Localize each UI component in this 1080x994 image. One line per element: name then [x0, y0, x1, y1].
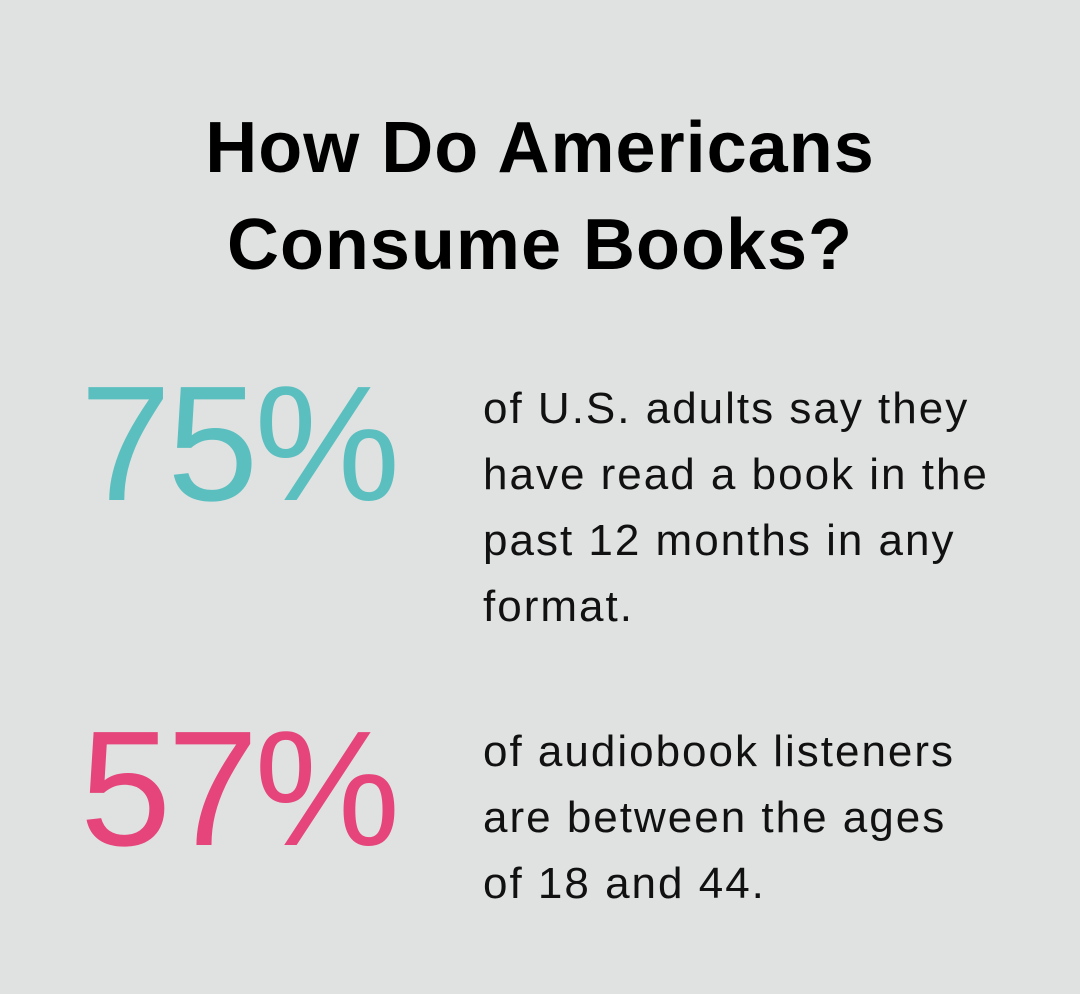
title: How Do Americans	[205, 108, 875, 188]
text: 75% description: format.	[483, 582, 634, 631]
text: 57% description: are between the ages	[483, 793, 946, 842]
text: 75% description: have read a book in the	[483, 450, 989, 499]
title	[205, 108, 875, 285]
text: 75% description: past 12 months in any	[483, 516, 955, 565]
stat: 57%: 57%	[80, 697, 396, 880]
title: Consume Books?	[227, 205, 853, 285]
text: 75% description: of U.S. adults say they	[483, 384, 969, 433]
text: 57% description: of audiobook listeners	[483, 727, 955, 776]
text: 75% description	[483, 384, 989, 631]
stat: 75%: 75%	[80, 352, 396, 535]
text: 57% description: of 18 and 44.	[483, 859, 766, 908]
text: 57% description	[483, 727, 955, 908]
